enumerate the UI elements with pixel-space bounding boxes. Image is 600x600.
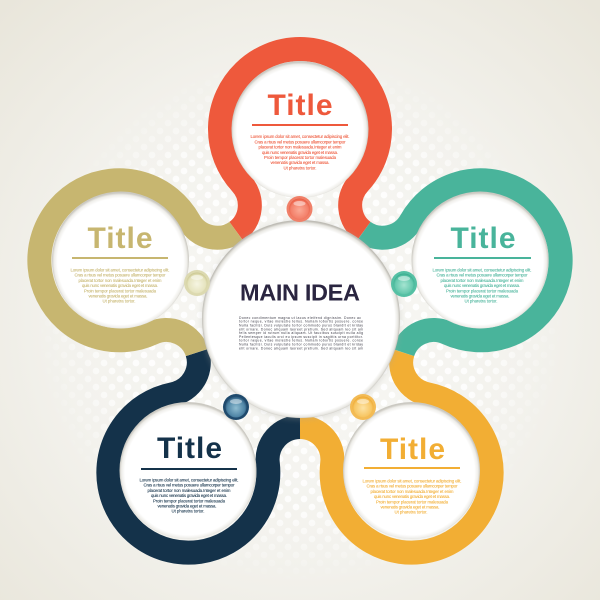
body text: [362, 478, 462, 515]
body text: placerat tortor non malesuada.Integer et enim: [258, 145, 342, 150]
body text: Proin tempor placerat tortor malesuada: [153, 498, 226, 503]
inner white circle: [232, 61, 368, 198]
title: Title: [268, 89, 332, 122]
title rule: [434, 257, 531, 259]
body text: [432, 268, 532, 304]
title rule: [364, 467, 460, 469]
main body text: [239, 316, 363, 350]
inner white circle: [343, 402, 480, 539]
body text: Cras a risus vel metus posuere ullamcorper tempor: [144, 483, 235, 488]
main body text: felis semper id rutrum nulla aliquam. Ut faucibus suscipit nulla alig: [239, 331, 363, 335]
body text: Lorem ipsum dolor sit amet, consectetur adipiscing elit.: [432, 268, 532, 272]
main body text: elit ornare. Donec aliquam laoreet pretium. Sed aliquam leo sit am: [239, 327, 363, 331]
main body text: Pellentesque iaculis orci eu ipsum suscipit in sagittis urna porttitor.: [239, 335, 363, 339]
panel: bottom left navy: [77, 343, 313, 584]
main heading: MAIN IDEA: [240, 280, 360, 306]
panel: main idea: [202, 220, 400, 420]
body text: Proin tempor placerat tortor malesuada: [84, 288, 157, 293]
body text: venenatis gravida eget et massa.: [450, 294, 510, 298]
inner white circle: [120, 402, 256, 539]
body text: quis nunc venenatis gravida eget et massa.: [262, 150, 338, 155]
button: olive: [184, 270, 210, 296]
band: teal petal: [358, 159, 581, 368]
title: Title: [157, 432, 222, 465]
title: Title: [88, 222, 152, 255]
body text: placerat tortor non malesuada.Integer et enim: [370, 489, 454, 494]
main white circle: [202, 220, 400, 418]
body text: Cras a risus vel metus posuere ullamcorper tempor: [436, 273, 528, 278]
button: red: [286, 196, 312, 222]
band: olive petal: [19, 159, 242, 368]
button: teal: [391, 271, 417, 297]
body text: quis nunc venenatis gravida eget et massa.: [151, 493, 227, 498]
body text: quis nunc venenatis gravida eget et massa.: [444, 283, 520, 288]
body text: venenatis gravida eget et massa.: [380, 504, 440, 510]
body text: Ut pharetra tortor.: [284, 165, 316, 170]
body text: Ut pharetra tortor.: [464, 299, 498, 304]
main body text: elit ornare. Donec aliquam laoreet pretium. Sed aliquam leo sit am: [239, 346, 363, 350]
panel: right teal: [358, 159, 581, 368]
panel: bottom right amber: [287, 343, 523, 584]
band: navy petal: [77, 343, 313, 584]
body text: Proin tempor placerat tortor malesuada: [446, 288, 519, 293]
body text: Ut pharetra tortor.: [394, 510, 428, 515]
title: Title: [450, 222, 516, 255]
body text: Lorem ipsum dolor sit amet, consectetur adipiscing elit.: [140, 478, 238, 482]
body text: Ut pharetra tortor.: [102, 299, 136, 304]
body text: [140, 478, 238, 514]
body text: quis nunc venenatis gravida eget et massa.: [374, 494, 450, 499]
body text: Proin tempor placerat tortor malesuada: [264, 155, 337, 160]
body text: quis nunc venenatis gravida eget et massa.: [82, 283, 158, 288]
title rule: [252, 124, 348, 126]
title rule: [72, 257, 168, 259]
title: Title: [380, 433, 445, 466]
body text: Lorem ipsum dolor sit amet, consectetur adipiscing elit.: [362, 478, 462, 484]
body text: [70, 268, 170, 304]
body text: Cras a risus vel metus posuere ullamcorper tempor: [74, 273, 166, 278]
button: navy: [223, 394, 249, 420]
body text: venenatis gravida eget et massa.: [88, 294, 148, 298]
band: amber petal: [287, 343, 523, 584]
body text: venenatis gravida eget et massa.: [158, 504, 216, 508]
main body text: Nulla facilisi. Duis vulputate tortor commodo purus blandit et kriday: [239, 342, 363, 346]
body text: placerat tortor non malesuada.Integer et enim: [440, 278, 524, 283]
body text: placerat tortor non malesuada.Integer et enim: [78, 278, 162, 283]
main body text: Donec condimentum magna ut lacus eleifend dignissim. Donec ac: [239, 316, 361, 320]
main body text: tortor neque, vitae molestie tellus. Nullam lobortis posuere. conse: [239, 339, 363, 343]
body text: Cras a risus vel metus posuere ullamcorper tempor: [366, 484, 458, 489]
panel: left olive: [19, 159, 242, 368]
main circle shadow: [202, 220, 400, 420]
inner white circle: [52, 192, 189, 328]
halftone dot pattern: [85, 122, 514, 536]
inner white circle: [412, 192, 548, 328]
title rule: [141, 468, 237, 470]
body text: Lorem ipsum dolor sit amet, consectetur adipiscing elit.: [70, 268, 170, 272]
body text: [250, 134, 350, 170]
main body text: Nulla facilisi. Duis vulputate tortor commodo purus blandit et kriday: [239, 324, 363, 328]
body text: placerat tortor non malesuada.Integer et enim: [148, 488, 231, 493]
body text: venenatis gravida eget et massa.: [270, 160, 330, 165]
main body text: tortor neque, vitae molestie tellus. Nullam lobortis posuere. conse: [239, 320, 363, 324]
body text: Proin tempor placerat tortor malesuada: [376, 499, 449, 504]
body text: Cras a risus vel metus posuere ullamcorper tempor: [254, 139, 346, 144]
band: red petal: [220, 49, 380, 232]
body text: Lorem ipsum dolor sit amet, consectetur adipiscing elit.: [250, 134, 350, 139]
button: amber: [350, 394, 376, 420]
panel: top red: [220, 49, 380, 232]
body text: Ut pharetra tortor.: [172, 509, 204, 514]
